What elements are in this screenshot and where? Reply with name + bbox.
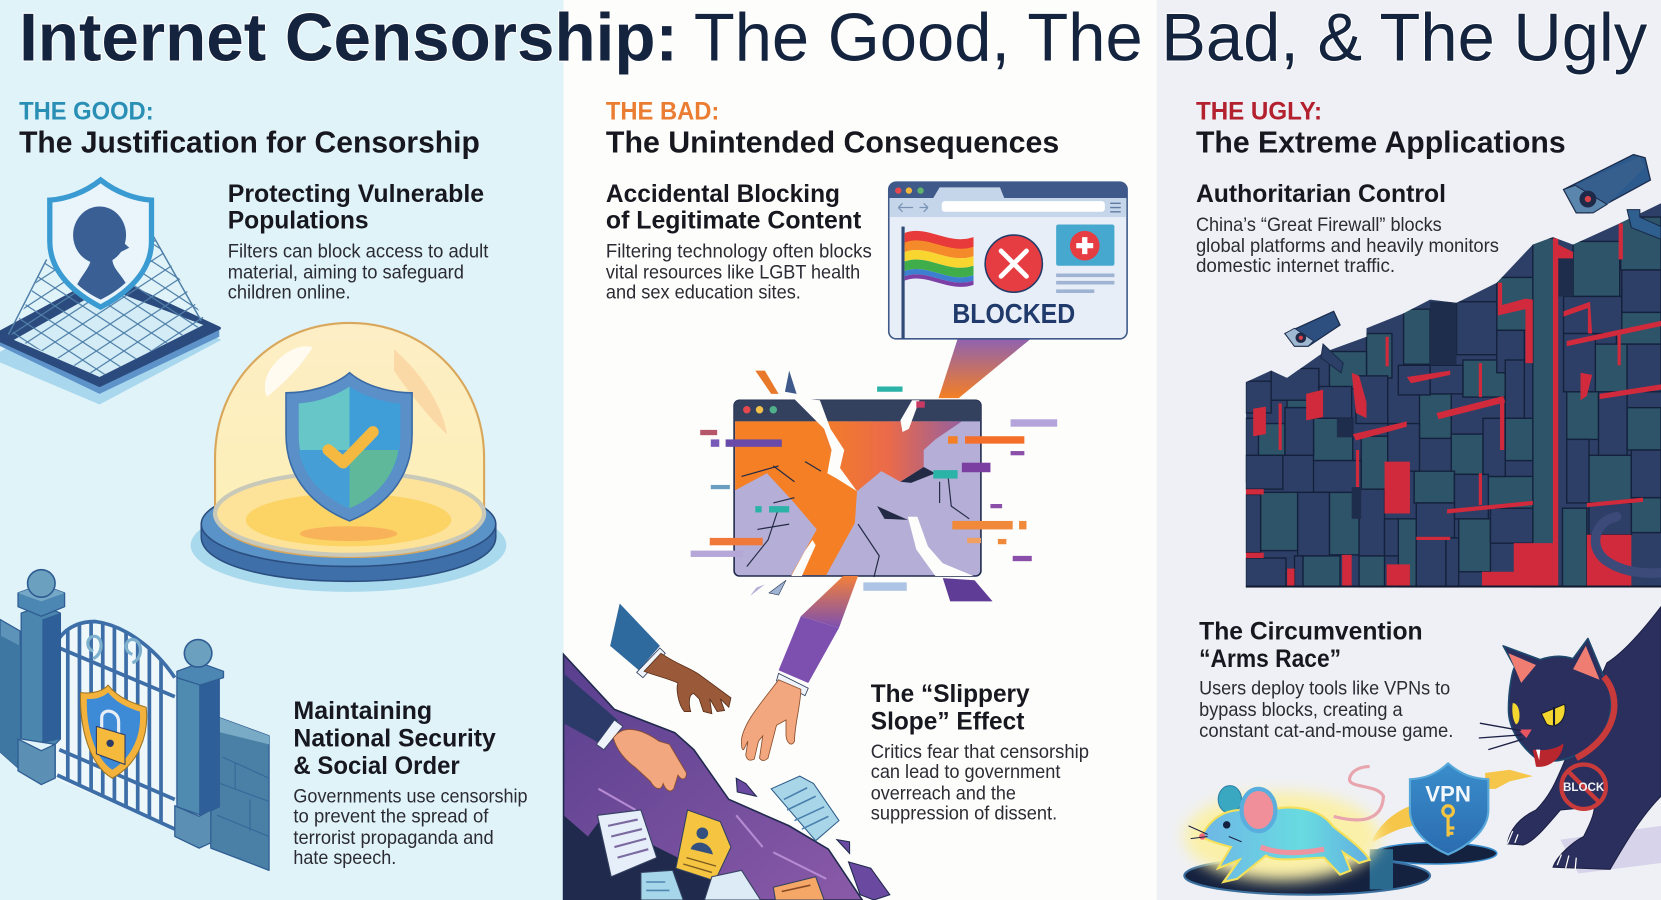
text: authoritarian control — [1196, 180, 1499, 277]
text: accidental blocking — [606, 180, 872, 304]
heading: the ugly — [1196, 98, 1566, 159]
arrow: beam down to arm — [801, 576, 858, 628]
icon: slippery slope rock with documents — [564, 654, 862, 900]
text: circumvention arms race: Users deploy tools like VPNs to — [1199, 679, 1450, 700]
icon: rainbow flag — [905, 231, 974, 287]
text: protecting vulnerable populations: children online. — [228, 283, 351, 304]
text: national security: hate speech. — [293, 848, 396, 869]
text: slippery slope: can lead to government — [871, 762, 1061, 783]
text: circumvention arms race: constant cat-and-mouse game. — [1199, 721, 1453, 742]
icon: connecting mouse hole — [1184, 843, 1497, 895]
heading: the ugly: THE UGLY: — [1196, 98, 1322, 126]
text: circumvention arms race: “Arms Race” — [1199, 645, 1341, 673]
heading: the good: The Justification for Censorship — [19, 124, 480, 159]
heading: the good: THE GOOD: — [19, 98, 154, 126]
text: slippery slope: suppression of dissent. — [871, 804, 1057, 825]
text: authoritarian control: Authoritarian Control — [1196, 180, 1446, 208]
icon: VPN shield with key — [1410, 763, 1488, 854]
icon: large security camera — [1564, 155, 1661, 239]
text: authoritarian control: China’s “Great Firewall” blocks — [1196, 215, 1442, 236]
text: accidental blocking: Accidental Blocking — [606, 180, 840, 208]
icon: purple sleeved arm with peach hand — [742, 616, 839, 760]
icon: glass dome with shield — [191, 323, 506, 592]
title — [19, 0, 1647, 75]
icon: black cat — [1479, 607, 1661, 869]
icon: white document — [597, 810, 657, 877]
icon: block badge on cat — [1561, 764, 1606, 809]
text: slippery slope: Critics fear that censorship — [871, 742, 1089, 763]
text: slippery slope — [871, 680, 1089, 825]
icon: glowing mouse — [1184, 767, 1383, 882]
text: circumvention arms race — [1199, 618, 1453, 742]
text: protecting vulnerable populations — [228, 180, 489, 304]
decoration: falling rock shards — [736, 778, 890, 900]
text: circumvention arms race: bypass blocks, creating a — [1199, 700, 1403, 721]
icon: blue floating document — [771, 776, 839, 841]
text: national security: terrorist propaganda and — [293, 828, 494, 849]
icon: tablet with net and child shield — [0, 180, 221, 404]
text: accidental blocking: and sex education sites. — [606, 283, 801, 304]
icon: shattered browser window — [734, 398, 981, 577]
text: national security: Governments use censorship — [293, 787, 528, 808]
text: slippery slope: overreach and the — [871, 783, 1016, 804]
text: authoritarian control: global platforms and heavily monitors — [1196, 236, 1499, 257]
arrow: beam from blocked window — [939, 339, 1031, 398]
icon: blue sleeved arm with brown hand — [610, 604, 731, 714]
icon: great firewall brick wall — [1246, 201, 1661, 588]
text: protecting vulnerable populations: material, aiming to safeguard — [228, 262, 464, 283]
icon: cat tail over wall — [1596, 517, 1661, 573]
icon: shadow under cat — [1560, 826, 1661, 874]
panel: the good background — [0, 0, 564, 900]
heading: the ugly: The Extreme Applications — [1196, 124, 1566, 159]
text: national security: Maintaining — [293, 697, 432, 725]
panel: the ugly background — [1157, 0, 1661, 900]
title: Internet Censorship: — [19, 0, 678, 75]
text: protecting vulnerable populations: Filters can block access to adult — [228, 241, 489, 262]
icon: blocked browser window — [889, 182, 1127, 339]
heading: the bad: THE BAD: — [606, 98, 719, 126]
heading: the good — [19, 98, 480, 159]
heading: the bad: The Unintended Consequences — [606, 124, 1059, 159]
arrow: yellow escape streak — [1373, 770, 1533, 842]
text: circumvention arms race: The Circumvention — [1199, 618, 1423, 646]
text: slippery slope: The “Slippery — [871, 680, 1030, 708]
icon: block badge on cat: BLOCK — [1563, 781, 1605, 794]
text: national security: & Social Order — [293, 752, 460, 780]
text: accidental blocking: Filtering technology often blocks — [606, 241, 872, 262]
icon: iron gate with shield lock — [0, 570, 269, 870]
icon: blocked browser window: BLOCKED — [952, 298, 1075, 329]
text: protecting vulnerable populations: Protecting Vulnerable — [228, 180, 484, 208]
text: national security: National Security — [293, 724, 496, 752]
text: authoritarian control: domestic internet traffic. — [1196, 256, 1395, 277]
title: The Good, The Bad, & The Ugly — [694, 0, 1647, 75]
panel: the bad background — [564, 0, 1157, 900]
text: accidental blocking: of Legitimate Content — [606, 207, 862, 235]
icon: small security camera — [1285, 311, 1343, 373]
icon: VPN shield with key: VPN — [1425, 782, 1471, 807]
icon: yellow profile document — [676, 810, 731, 881]
text: national security — [293, 697, 528, 869]
text: protecting vulnerable populations: Populations — [228, 207, 369, 235]
text: slippery slope: Slope” Effect — [871, 708, 1025, 736]
decoration: glitch fragments around window — [691, 371, 1057, 601]
icon: navy sleeved arm with hand on slope — [564, 673, 686, 791]
text: accidental blocking: vital resources like LGBT health — [606, 262, 860, 283]
heading: the bad — [606, 98, 1059, 159]
text: national security: to prevent the spread of — [293, 807, 489, 828]
